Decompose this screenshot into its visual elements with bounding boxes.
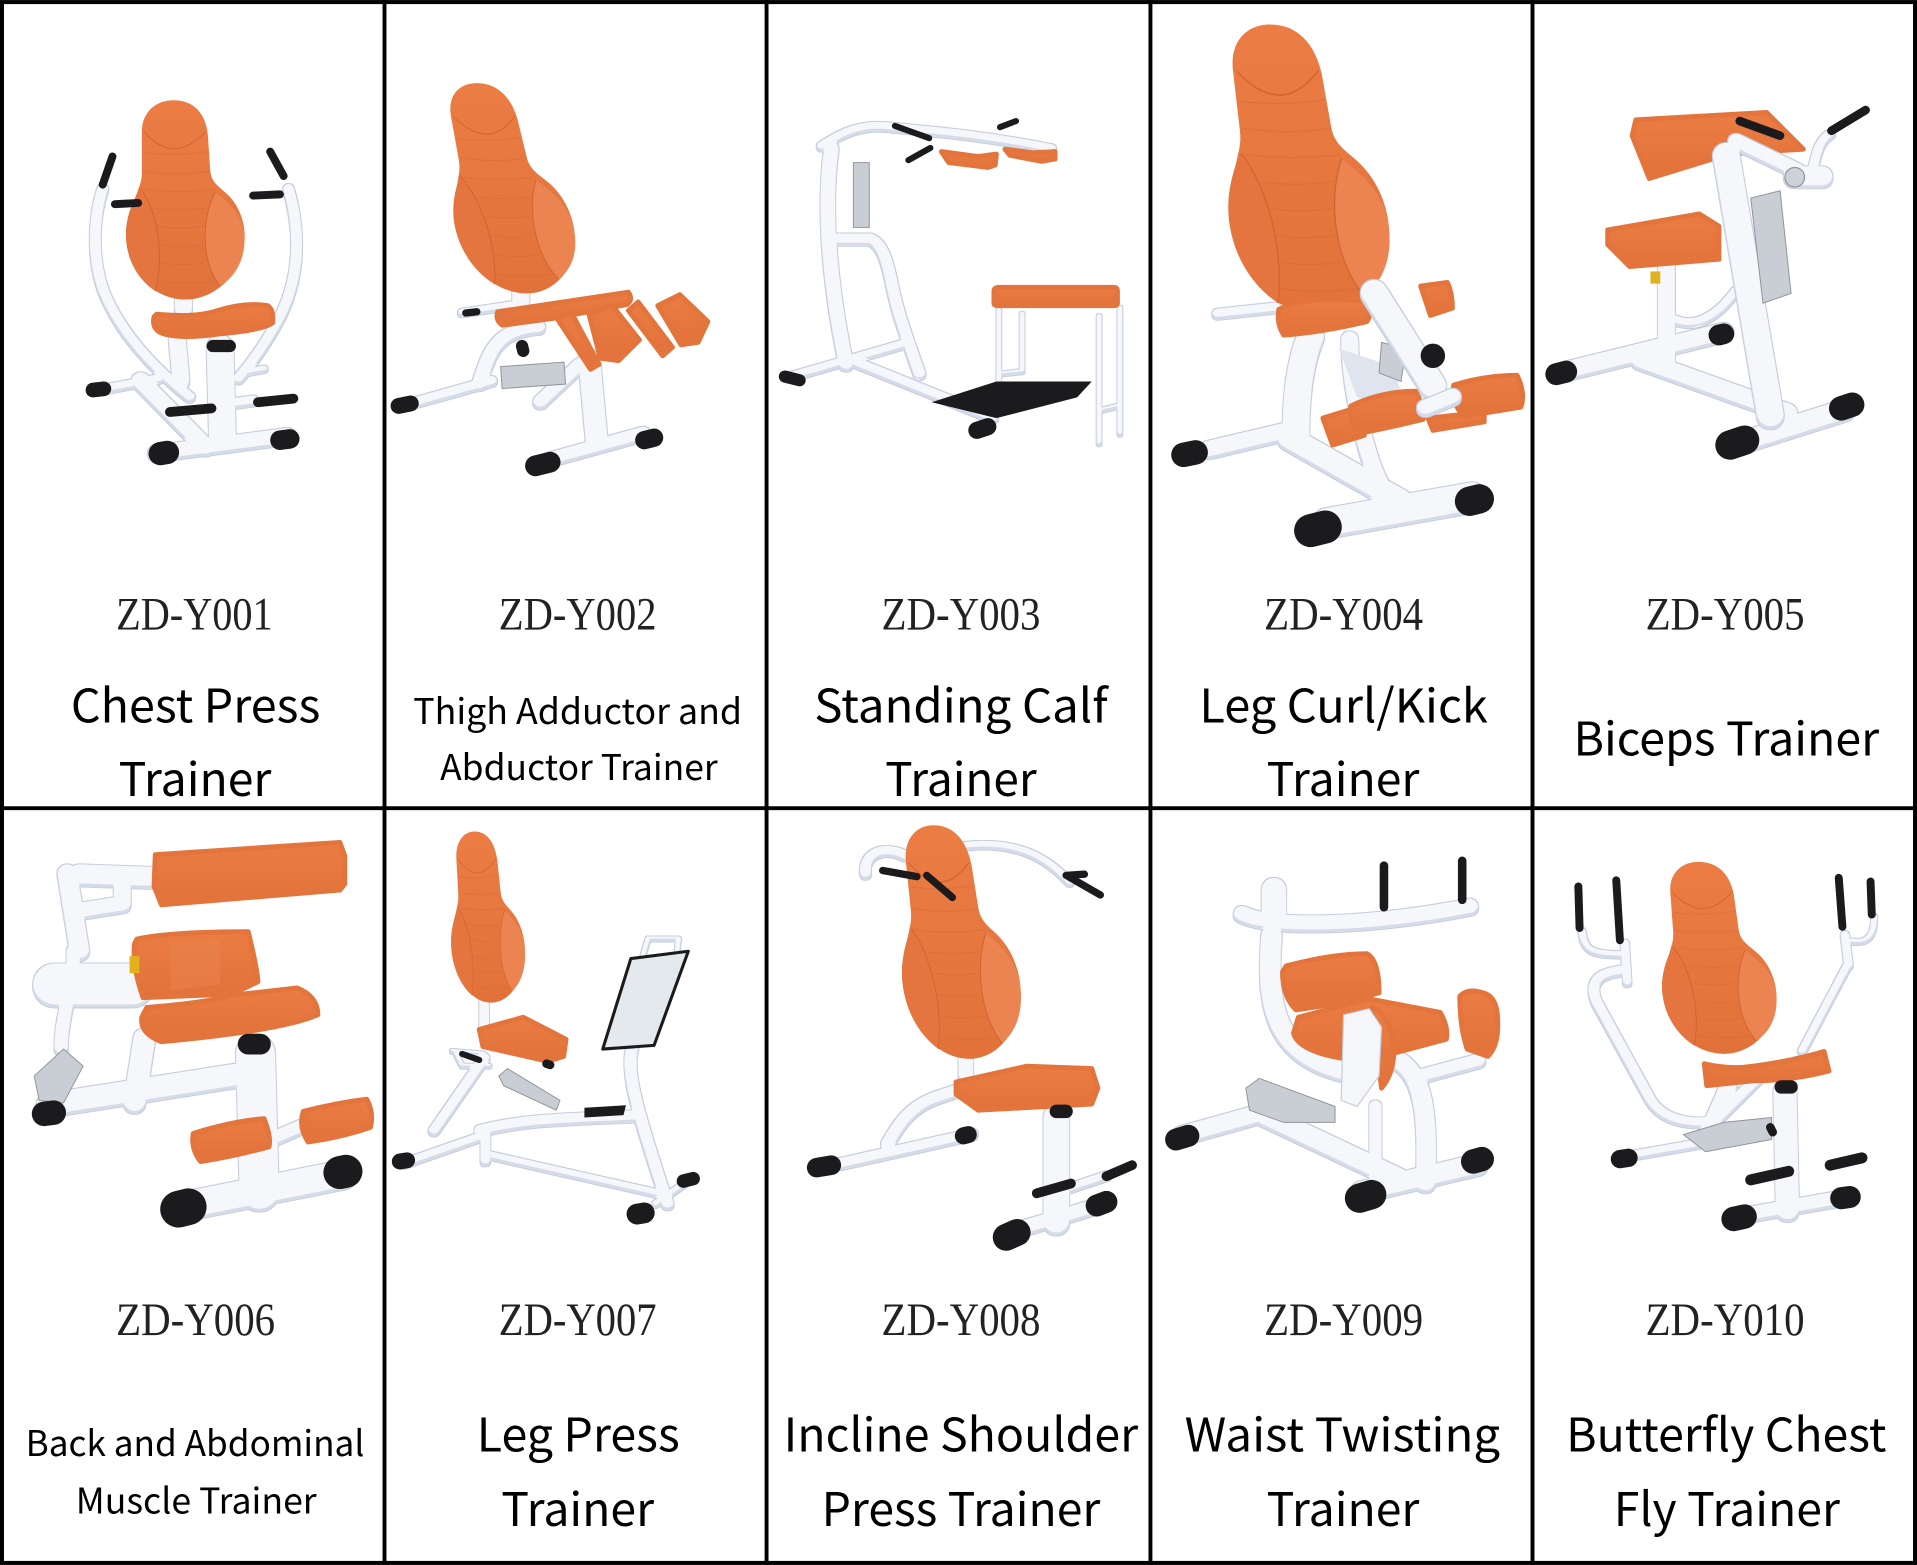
- product name: Thigh Adductor and: [413, 684, 742, 735]
- product name: [26, 1416, 364, 1525]
- panel: ZD-Y006 Back and Abdominal Muscle Trainer: [4, 811, 384, 1560]
- product name: Trainer: [1267, 743, 1420, 810]
- product name: Abductor Trainer: [440, 740, 718, 791]
- model number: ZD-Y008: [881, 1295, 1040, 1346]
- machine: waist twisting trainer: [1176, 861, 1498, 1198]
- machine: leg press trainer: [400, 831, 693, 1214]
- product name: Butterfly Chest: [1566, 1398, 1886, 1465]
- model number: ZD-Y007: [499, 1295, 657, 1346]
- panel: ZD-Y002 Thigh Adductor and Abductor Trainer: [388, 4, 765, 806]
- panel: ZD-Y008 Incline Shoulder Press Trainer: [770, 811, 1148, 1560]
- model number: ZD-Y002: [499, 590, 657, 641]
- model number: ZD-Y003: [881, 590, 1040, 641]
- product name: [413, 684, 742, 791]
- machine: leg curl and kick trainer: [1183, 24, 1523, 531]
- product name: Standing Calf: [814, 670, 1110, 737]
- panel: ZD-Y001 Chest Press Trainer: [4, 4, 384, 810]
- product name: [1185, 1398, 1500, 1540]
- product name: Trainer: [885, 743, 1038, 810]
- product name: Trainer: [119, 743, 272, 810]
- panel: ZD-Y003 Standing Calf Trainer: [770, 4, 1148, 810]
- product name: Fly Trainer: [1614, 1473, 1841, 1540]
- model number: ZD-Y005: [1646, 590, 1805, 641]
- product name: Muscle Trainer: [76, 1474, 317, 1525]
- model number: ZD-Y009: [1264, 1295, 1423, 1346]
- product name: Back and Abdominal: [26, 1416, 364, 1467]
- product name: [477, 1398, 680, 1540]
- product name: Chest Press: [71, 670, 320, 737]
- product name: [1199, 670, 1488, 810]
- product name: Press Trainer: [822, 1473, 1101, 1540]
- model number: ZD-Y004: [1264, 590, 1423, 641]
- panel: ZD-Y005 Biceps Trainer: [1536, 4, 1912, 806]
- panel: ZD-Y010 Butterfly Chest Fly Trainer: [1536, 811, 1912, 1560]
- product name: Incline Shoulder: [784, 1398, 1139, 1465]
- product name: Biceps Trainer: [1573, 703, 1880, 770]
- product name: Trainer: [501, 1473, 655, 1540]
- model number: ZD-Y001: [116, 590, 273, 641]
- panel: ZD-Y004 Leg Curl/Kick Trainer: [1153, 4, 1531, 810]
- machine: incline shoulder press trainer: [817, 825, 1132, 1237]
- machine: chest press trainer: [93, 100, 297, 454]
- product name: Waist Twisting: [1185, 1398, 1500, 1465]
- machine: butterfly chest fly trainer: [1578, 862, 1874, 1219]
- product name: [71, 670, 320, 810]
- product name: [814, 670, 1110, 810]
- model number: ZD-Y006: [116, 1295, 275, 1346]
- machine: back and abdominal muscle trainer: [34, 842, 372, 1209]
- product name: Leg Curl/Kick: [1199, 670, 1488, 737]
- product name: Leg Press: [477, 1398, 680, 1465]
- panel: ZD-Y009 Waist Twisting Trainer: [1153, 811, 1531, 1560]
- machine: standing calf trainer: [785, 121, 1120, 444]
- machine: thigh adductor and abductor trainer: [399, 83, 708, 466]
- machine: biceps trainer: [1556, 110, 1866, 445]
- product name: [1566, 1398, 1886, 1540]
- product name: Trainer: [1267, 1473, 1420, 1540]
- product name: [784, 1398, 1139, 1540]
- model number: ZD-Y010: [1646, 1295, 1805, 1346]
- panel: ZD-Y007 Leg Press Trainer: [388, 811, 765, 1560]
